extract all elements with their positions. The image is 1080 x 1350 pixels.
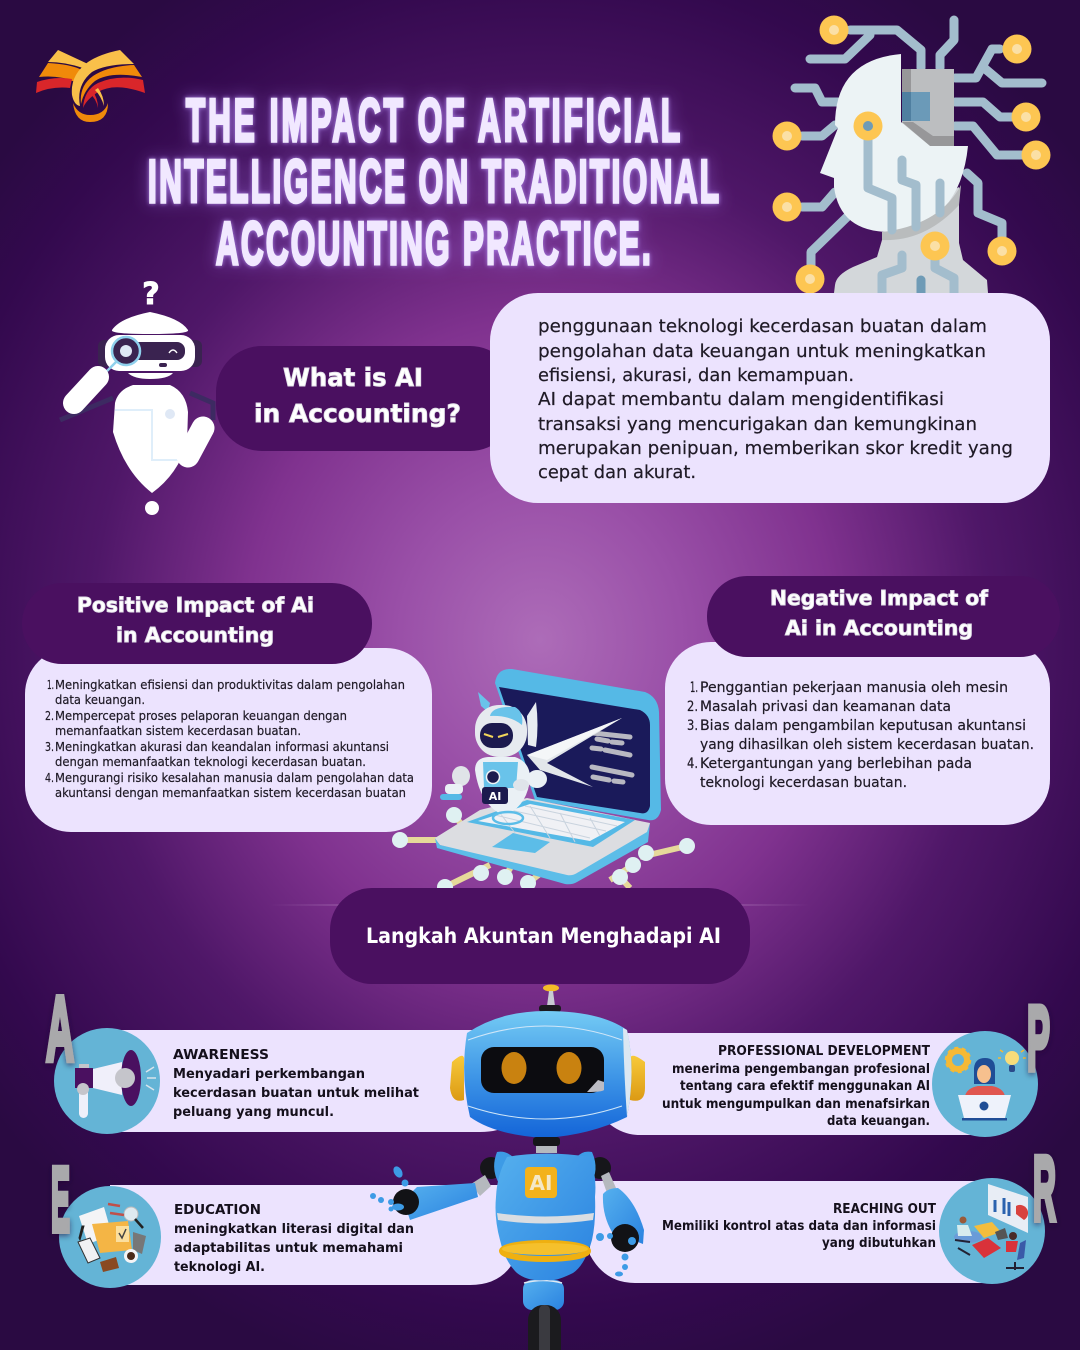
icon: thinking robot: ?	[142, 277, 160, 312]
panel: awareness: kecerdasan buatan untuk melihat	[173, 1085, 420, 1101]
panel: positive impact: Positive Impact of Ai	[77, 593, 314, 617]
panel: reaching out: yang dibutuhkan	[822, 1236, 936, 1251]
panel: professional development: untuk mengumpulkan dan menafsirkan	[662, 1097, 930, 1112]
panel: definition: merupakan penipuan, memberikan skor kredit yang	[538, 438, 1013, 459]
panel: definition	[490, 293, 1050, 503]
title: THE IMPACT OF ARTIFICIAL	[186, 88, 680, 155]
icon: blue robot: AI	[530, 1171, 552, 1195]
panel: positive impact: dengan memanfaatkan teknologi kecerdasan buatan.	[55, 755, 366, 769]
panel: what is AI heading	[216, 346, 516, 451]
panel: negative impact: yang dihasilkan oleh sistem kecerdasan buatan.	[700, 737, 1034, 753]
panel: positive impact: 2.	[45, 709, 54, 723]
panel: positive impact: 4.	[45, 771, 54, 785]
panel: professional development: data keuangan.	[827, 1114, 930, 1129]
icon: laptop with small robot	[392, 669, 695, 895]
panel: awareness	[46, 978, 520, 1134]
title: ACCOUNTING PRACTICE.	[216, 211, 651, 278]
panel: what is AI heading: What is AI	[283, 363, 423, 392]
icon: laptop with small robot: AI	[489, 790, 501, 803]
panel: positive impact: memanfaatkan sistem kecerdasan buatan.	[55, 724, 301, 738]
panel: education: EDUCATION	[174, 1202, 261, 1218]
logo	[36, 50, 145, 122]
section heading: langkah akuntan: Langkah Akuntan Menghadapi AI	[366, 924, 721, 948]
panel: professional development: tentang cara efektif menggunakan AI	[680, 1079, 930, 1094]
panel: negative impact: teknologi kecerdasan buatan.	[700, 775, 907, 791]
panel: definition: transaksi yang mencurigakan dan kemungkinan	[538, 414, 977, 435]
icon: person with laptop	[946, 1048, 1026, 1120]
panel: positive impact: 1.	[47, 678, 54, 692]
panel: awareness: AWARENESS	[173, 1047, 269, 1063]
panel: positive impact: akuntansi dengan memanfaatkan sistem kecerdasan buatan	[55, 786, 406, 800]
panel: negative impact: 2.	[687, 699, 698, 715]
panel: education: meningkatkan literasi digital dan	[174, 1221, 414, 1237]
panel: awareness: A	[46, 978, 74, 1080]
panel: positive impact: Mengurangi risiko kesalahan manusia dalam pengolahan data	[55, 771, 414, 785]
panel: definition: penggunaan teknologi kecerdasan buatan dalam	[538, 316, 987, 337]
icon: finance documents folder	[78, 1204, 146, 1272]
panel: negative impact	[665, 576, 1060, 825]
panel: negative impact: Penggantian pekerjaan manusia oleh mesin	[700, 680, 1008, 696]
panel: reaching out: Memiliki kontrol atas data dan informasi	[662, 1219, 936, 1234]
panel: reaching out: REACHING OUT	[833, 1202, 936, 1217]
panel: positive impact: data keuangan.	[55, 693, 145, 707]
panel: professional development: menerima pengembangan profesional	[672, 1062, 930, 1077]
left arm	[370, 1157, 502, 1220]
icon: megaphone	[75, 1050, 156, 1118]
panel: positive impact	[22, 583, 432, 832]
panel: education: E	[51, 1149, 70, 1251]
panel: positive impact: 3.	[45, 740, 54, 754]
panel: awareness: peluang yang muncul.	[173, 1104, 334, 1120]
panel: awareness: Menyadari perkembangan	[173, 1066, 365, 1082]
panel: negative impact: Bias dalam pengambilan keputusan akuntansi	[700, 718, 1026, 734]
icon: AI head with circuits	[772, 16, 1050, 294]
panel: professional development: PROFESSIONAL DEVELOPMENT	[718, 1044, 930, 1059]
panel: negative impact: Ai in Accounting	[785, 616, 973, 640]
panel: definition: AI dapat membantu dalam mengidentifikasi	[538, 389, 944, 410]
panel: education: adaptabilitas untuk memahami	[174, 1240, 403, 1256]
panel: negative impact: 1.	[690, 680, 698, 696]
panel: negative impact: Masalah privasi dan keamanan data	[700, 699, 951, 715]
section heading: langkah akuntan	[330, 888, 750, 984]
title	[148, 88, 719, 278]
right arm	[589, 1157, 644, 1276]
panel: negative impact: Negative Impact of	[770, 586, 988, 610]
panel: negative impact: Ketergantungan yang berlebihan pada	[700, 756, 972, 772]
icon: team meeting	[954, 1184, 1028, 1270]
panel: education: teknologi AI.	[174, 1259, 265, 1275]
panel: negative impact: 3.	[687, 718, 698, 734]
icon: blue robot	[370, 984, 645, 1350]
panel: definition: efisiensi, akurasi, dan kemampuan.	[538, 365, 854, 386]
panel: positive impact: Mempercepat proses pelaporan keuangan dengan	[55, 709, 347, 723]
panel: education	[51, 1149, 520, 1288]
title: INTELLIGENCE ON TRADITIONAL	[148, 149, 719, 216]
panel: what is AI heading: in Accounting?	[254, 399, 461, 428]
panel: definition: pengolahan data keuangan untuk meningkatkan	[538, 341, 986, 362]
panel: positive impact: Meningkatkan efisiensi dan produktivitas dalam pengolahan	[55, 678, 405, 692]
panel: negative impact: 4.	[687, 756, 698, 772]
icon: thinking robot	[60, 277, 213, 515]
panel: positive impact: in Accounting	[116, 623, 274, 647]
panel: definition: cepat dan akurat.	[538, 462, 696, 483]
panel: professional development	[590, 988, 1050, 1137]
panel: reaching out	[590, 1138, 1056, 1284]
panel: positive impact: Meningkatkan akurasi dan keandalan informasi akuntansi	[55, 740, 389, 754]
